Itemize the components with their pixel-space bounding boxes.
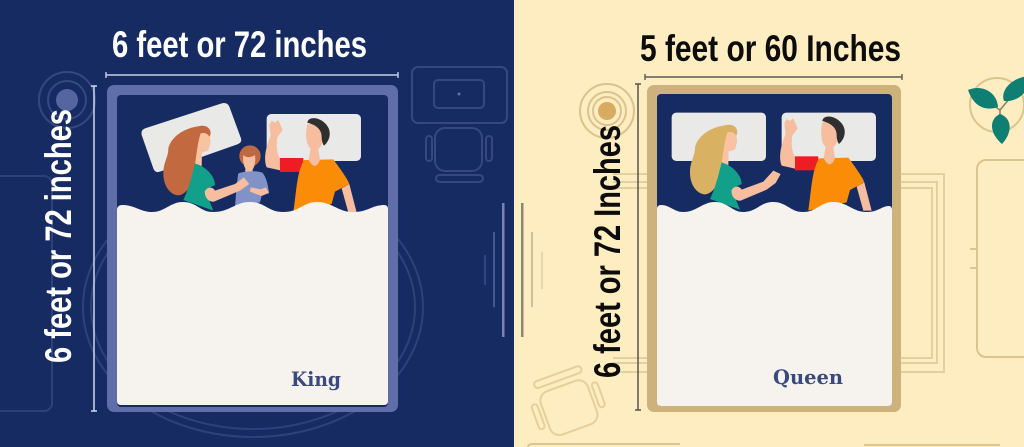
dimension line: king width (106, 72, 398, 78)
label: King: King (291, 367, 341, 391)
background: rug frame outlines (613, 174, 944, 372)
background: lamp circles (580, 84, 634, 138)
man (780, 116, 872, 211)
dimension line: queen length (635, 84, 641, 410)
blanket (117, 202, 388, 405)
bed mattress (657, 94, 892, 406)
bed frame (647, 85, 901, 412)
heading: king width: 6 feet or 72 inches (112, 24, 367, 65)
decorative vertical lines (521, 203, 543, 337)
queen couple in bed (672, 113, 876, 211)
pillow left tilted (141, 103, 241, 172)
bed mattress (117, 95, 388, 407)
pillow left (672, 113, 766, 161)
background: desk and chair outline (412, 67, 507, 182)
bed frame (107, 85, 398, 412)
icon: potted plant (968, 76, 1024, 144)
panel: queen bed side (514, 0, 1024, 447)
woman (690, 125, 781, 210)
label: Queen: Queen (773, 365, 843, 389)
pillow right (267, 114, 361, 161)
pillow right (782, 113, 876, 161)
background: right cabinet outline (970, 160, 1024, 357)
background: bottom table outlines (528, 444, 1000, 447)
heading: king length: 6 feet or 72 inches (38, 109, 79, 363)
background: nightstand circle lamp (39, 72, 95, 128)
background: armchair outline (524, 362, 610, 441)
heading: queen width: 5 feet or 60 Inches (640, 28, 901, 69)
decorative vertical lines (484, 203, 504, 337)
heading: queen length: 6 feet or 72 Inches (587, 125, 628, 378)
man (265, 118, 357, 212)
king family in bed (141, 103, 361, 212)
king bed (107, 85, 398, 412)
background: round rug (83, 177, 423, 437)
blanket (657, 202, 892, 406)
panel: king bed side (0, 0, 514, 447)
background: left cabinet outline (0, 176, 52, 411)
dimension line: queen width (645, 74, 902, 80)
child (235, 145, 269, 207)
woman (163, 126, 215, 211)
dimension line: king length (91, 86, 97, 411)
woman arm (205, 177, 249, 202)
queen bed (647, 85, 901, 412)
